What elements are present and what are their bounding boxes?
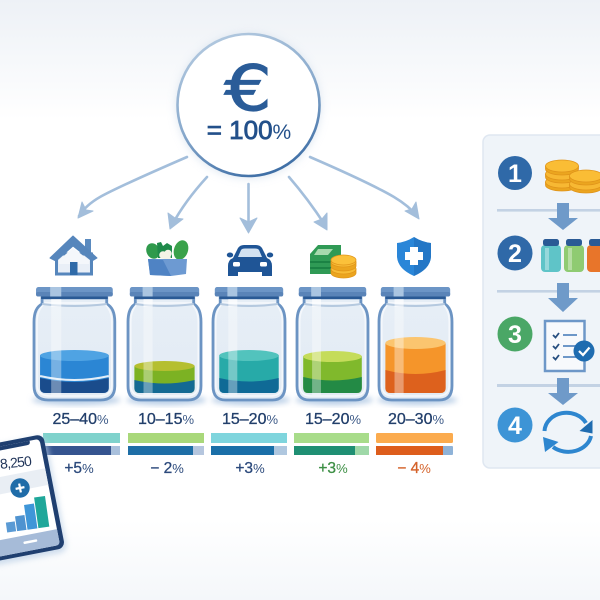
arrow: step 3 to 4 xyxy=(548,378,578,405)
change label: transport: +3% xyxy=(235,460,265,477)
icon: refresh cycle xyxy=(543,413,592,452)
jar: transport xyxy=(211,287,290,405)
step 1 badge: 1 xyxy=(508,160,522,188)
step 1 badge xyxy=(498,156,532,190)
icon: plus button xyxy=(9,477,31,499)
step 2 badge xyxy=(498,236,532,270)
jar: insurance xyxy=(377,287,457,405)
central circle: euro = 100%: = 100% xyxy=(207,115,291,145)
step 4 badge: 4 xyxy=(508,412,522,440)
bars: insurance xyxy=(376,433,453,455)
step 3 badge: 3 xyxy=(508,321,522,349)
arrow to insurance xyxy=(310,157,419,219)
icon: car xyxy=(227,245,273,276)
range label: insurance: 20–30% xyxy=(388,411,444,428)
change label: groceries: − 2% xyxy=(150,460,184,477)
mini bar chart xyxy=(3,496,49,533)
phone with balance and chart xyxy=(0,434,68,566)
icon: house xyxy=(50,236,97,275)
step 2 badge: 2 xyxy=(508,240,522,268)
bars: transport xyxy=(211,433,287,455)
jar: housing xyxy=(32,287,121,405)
icon: cash and coins xyxy=(310,245,356,278)
change label: housing: +5% xyxy=(64,460,94,477)
icon: small jars xyxy=(541,239,600,272)
arrow: step 2 to 3 xyxy=(548,283,578,312)
change label: insurance: − 4% xyxy=(397,460,431,477)
icon: coin stacks xyxy=(546,160,600,193)
jar: savings xyxy=(295,287,373,405)
central circle: euro = 100%: € xyxy=(224,53,272,125)
bars: groceries xyxy=(128,433,204,455)
change label: savings: +3% xyxy=(318,460,348,477)
arrow to housing xyxy=(78,157,187,218)
bars: savings xyxy=(294,433,369,455)
icon: shield xyxy=(397,237,431,276)
panel: four steps xyxy=(483,135,600,468)
icon: groceries basket xyxy=(144,238,191,276)
central circle: euro = 100% xyxy=(178,34,320,177)
jar: groceries xyxy=(126,287,206,405)
step 3 badge xyxy=(498,316,532,352)
arrow to groceries xyxy=(168,177,207,229)
range label: groceries: 10–15% xyxy=(138,411,194,428)
arrow to transport xyxy=(240,184,257,233)
range label: housing: 25–40% xyxy=(52,411,109,428)
arrow: step 1 to 2 xyxy=(548,203,578,230)
step 4 badge xyxy=(498,408,532,442)
range label: savings: 15–20% xyxy=(305,411,361,428)
range label: transport: 15–20% xyxy=(222,411,278,428)
balance amount: 8,250 xyxy=(0,453,33,472)
icon: checklist xyxy=(545,321,594,371)
bars: housing xyxy=(43,433,120,455)
arrow to savings xyxy=(289,177,327,230)
